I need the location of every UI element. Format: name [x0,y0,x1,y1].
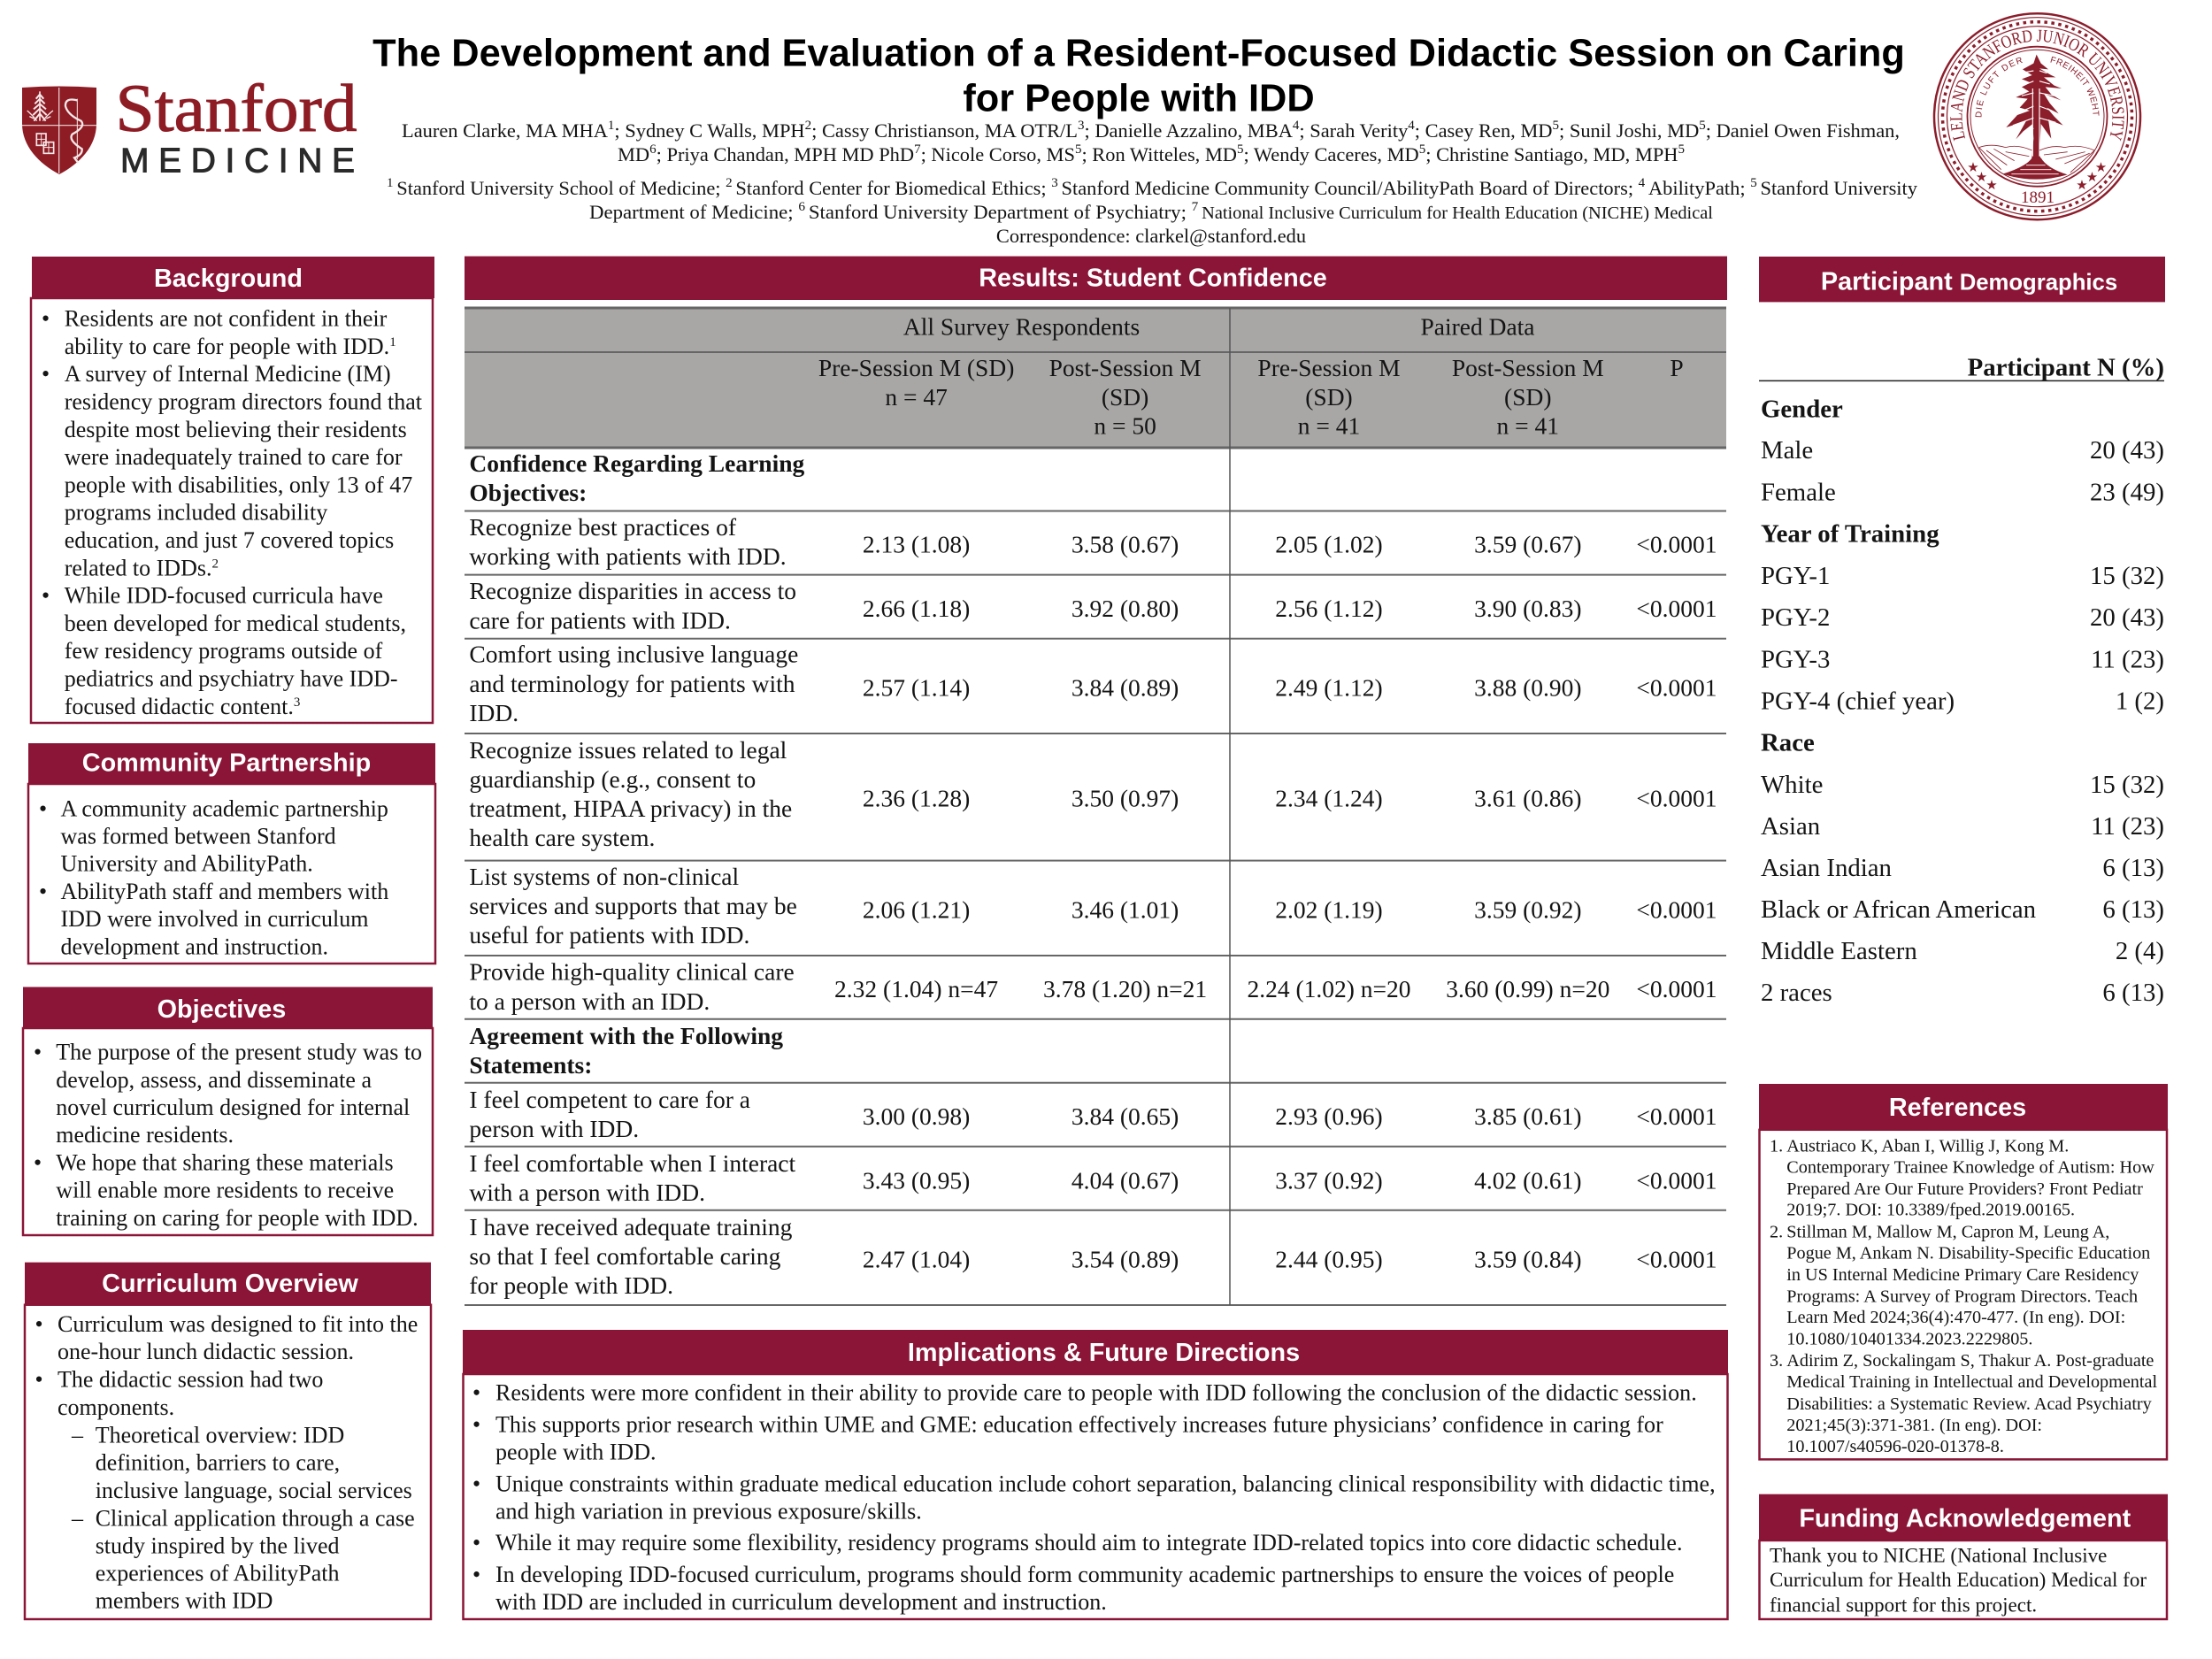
icon: Stanford University seal: LELAND STANFORD JUNIOR UNIVERSITY [1950,30,2124,142]
row: disparities: 3.90 (0.83) [1474,595,1582,622]
row: legal guardianship: <0.0001 [1636,784,1717,812]
heading: implications: Implications & Future Directions [908,1339,1300,1367]
table header: (SD) [1305,383,1353,411]
row: non-clinical services: services and supports that may be [469,892,797,919]
row: high-quality care: 3.78 (1.20) n=21 [1043,975,1207,1002]
row: disparities: 2.66 (1.18) [863,595,970,622]
table header: Pre-Session M [1257,354,1401,381]
table: demographics: 15 (32) [2090,771,2164,799]
icon: Stanford University seal [1932,12,2141,221]
icon: Stanford University seal: FREIHEIT WEHT [2050,57,2099,116]
row: legal guardianship: 2.34 (1.24) [1275,784,1383,812]
row: best practices: 3.59 (0.67) [1474,531,1582,558]
row: best practices [469,513,1717,570]
table header: n = 47 [885,383,948,411]
authors: MD6; Priya Chandan, MPH MD PhD7; Nicole Corso, MS5; Ron Witteles, MD5; Wendy Caceres, MD5; Christine Santiago, MD, MPH5 [618,142,1685,165]
icon: Stanford University seal: DIE LUFT DER [1975,57,2023,117]
text: references list: 1. [1770,1136,1783,1156]
text: references list: Disabilities: a Systematic Review. Acad Psychiatry [1786,1394,2153,1414]
section label: agreement: Agreement with the Following [469,1022,783,1049]
table: demographics: Asian [1761,812,1820,841]
row: legal guardianship: 2.36 (1.28) [863,784,970,812]
text: community partnership bullets: • [39,796,47,821]
table: demographics: Male [1761,436,1813,465]
text: funding acknowledgement [1759,1540,2167,1619]
row: adequate training: I have received adequate training [469,1213,793,1240]
table: demographics: Year of Training [1761,520,1939,549]
text: references list: 2019;7. DOI: 10.3389/fped.2019.00165. [1786,1201,2075,1220]
table: demographics: White [1761,771,1823,799]
text: implications bullets [464,1374,1727,1619]
icon: Stanford University seal: ★ [1967,159,1979,175]
text: objectives bullets [23,1028,433,1235]
text: background bullets: residency program directors found that [65,389,423,414]
row: competent: I feel competent to care for a [469,1086,750,1113]
text: background bullets: programs included disability [65,500,327,526]
row: adequate training: <0.0001 [1636,1246,1717,1273]
text: references list: Prepared Are Our Future Providers? Front Pediatr [1786,1179,2143,1199]
text: references list: Austriaco K, Aban I, Willig J, Kong M. [1786,1136,2069,1156]
row: adequate training [469,1213,1717,1299]
text: community partnership bullets: • [39,879,47,904]
table: demographics: 6 (13) [2102,979,2164,1007]
row: legal guardianship: 3.61 (0.86) [1474,784,1582,812]
text: curriculum overview bullets: Clinical application through a case [96,1506,415,1531]
text: curriculum overview bullets: Curriculum was designed to fit into the [58,1311,418,1337]
heading: community partnership [28,743,435,784]
heading: curriculum overview: Curriculum Overview [102,1270,358,1298]
table header: Pre-Session M (SD) [818,354,1014,381]
text: implications bullets: • [472,1471,480,1496]
text: objectives bullets: novel curriculum designed for internal [56,1094,410,1120]
logo: Stanford Medicine [22,72,357,180]
text: references list: Learn Med 2024;36(4):470-477. (In eng). DOI: [1786,1308,2125,1327]
text: references list: 2. [1770,1222,1783,1241]
row: best practices: 2.13 (1.08) [863,531,970,558]
row: high-quality care [469,957,1717,1015]
text: objectives bullets: • [34,1150,42,1175]
text: background bullets: few residency programs outside of [65,638,383,664]
logo: Stanford Medicine: MEDICINE [120,142,355,180]
table: demographics: 1 (2) [2116,687,2164,715]
table: student confidence [465,308,1726,1305]
text: implications bullets: with IDD are included in curriculum development and instruction. [495,1589,1107,1615]
row: competent: 2.93 (0.96) [1275,1102,1383,1130]
heading: community partnership: Community Partnership [82,749,371,777]
heading: background [32,257,434,298]
row: disparities: 2.56 (1.12) [1275,595,1383,622]
row: non-clinical services: 2.06 (1.21) [863,896,970,924]
text: references list: Pogue M, Ankam N. Disability-Specific Education [1786,1244,2150,1263]
heading: results: Results: Student Confidence [979,264,1327,292]
row: non-clinical services: <0.0001 [1636,896,1717,924]
icon: Stanford University seal: ★ [1985,177,1998,193]
authors [402,119,1900,165]
icon: Stanford University seal: ★ [2086,169,2098,185]
table: demographics: PGY-4 (chief year) [1761,687,1955,715]
affiliations and correspondence: Department of Medicine; 6 Stanford University Department of Psychiatry; 7 National Inclusive Curriculum for Health Education (NICHE) Medical [589,200,1713,223]
table: demographics: 20 (43) [2090,603,2164,632]
row: high-quality care: to a person with an IDD. [469,987,710,1015]
row: best practices: 2.05 (1.02) [1275,531,1383,558]
table: demographics: Race [1761,729,1815,757]
row: inclusive language [469,641,1717,726]
table header: Post-Session M [1452,354,1604,381]
text: background bullets: despite most believing their residents [65,417,407,442]
row: high-quality care: Provide high-quality clinical care [469,957,795,986]
section label: confidence [469,449,805,506]
panel: background [31,257,434,723]
text: curriculum overview bullets: study inspired by the lived [96,1532,340,1559]
table: demographics: 23 (49) [2090,478,2164,506]
affiliations and correspondence: Correspondence: clarkel@stanford.edu [996,225,1306,247]
table: demographics [1759,354,2164,1007]
table: demographics: 15 (32) [2090,562,2164,590]
text: background bullets: related to IDDs.2 [65,555,219,580]
row: competent: 3.85 (0.61) [1474,1102,1582,1130]
table: demographics: 6 (13) [2102,854,2164,882]
heading: objectives: Objectives [157,995,286,1024]
row: high-quality care: 2.24 (1.02) n=20 [1247,975,1411,1002]
text: background bullets: focused didactic content.3 [65,694,300,719]
heading: participant demographics [1759,257,2165,302]
icon: Stanford University seal: ★ [2076,177,2088,193]
heading: implications [463,1330,1728,1374]
row: non-clinical services: 2.02 (1.19) [1275,896,1383,924]
text: background bullets: were inadequately trained to care for [65,444,403,470]
text: implications bullets: • [472,1530,480,1555]
row: adequate training: 2.44 (0.95) [1275,1246,1383,1273]
text: curriculum overview bullets: – [71,1423,84,1448]
table header: All Survey Respondents [903,313,1140,340]
table header: Post-Session M [1049,354,1202,381]
row: legal guardianship: Recognize issues related to legal [469,736,787,764]
row: inclusive language: and terminology for patients with [469,670,795,697]
text: community partnership bullets: development and instruction. [60,934,328,959]
row: legal guardianship [469,736,1717,851]
section label: agreement: Statements: [469,1051,592,1079]
text: implications bullets: • [472,1562,480,1587]
text: implications bullets: In developing IDD-focused curriculum, programs should form community academic partnerships to ensure the voices of people [495,1562,1674,1587]
text: community partnership bullets: IDD were involved in curriculum [60,906,369,932]
heading: curriculum overview [25,1263,431,1305]
text: community partnership bullets [28,784,435,964]
row: competent: 3.84 (0.65) [1071,1102,1179,1130]
panel: objectives [23,987,433,1235]
table: demographics: 2 (4) [2116,937,2164,965]
heading: objectives [23,987,433,1028]
row: best practices: Recognize best practices of [469,513,737,541]
heading: references: References [1889,1094,2026,1122]
row: competent: <0.0001 [1636,1102,1717,1130]
icon: Stanford University seal: 1891 [2021,188,2055,207]
text: background bullets: ability to care for people with IDD.1 [65,334,396,359]
panel: participant demographics [1759,257,2165,1007]
row: high-quality care: <0.0001 [1636,975,1717,1002]
text: background bullets: A survey of Internal Medicine (IM) [65,361,391,387]
text: funding acknowledgement: Curriculum for Health Education) Medical for [1770,1569,2147,1591]
text: community partnership bullets: AbilityPath staff and members with [60,879,388,904]
row: inclusive language: 2.49 (1.12) [1275,673,1383,701]
text: background bullets: been developed for medical students, [65,611,406,636]
text: objectives bullets: The purpose of the present study was to [56,1039,422,1064]
text: references list: Medical Training in Intellectual and Developmental [1786,1372,2157,1392]
table header: Paired Data [1420,313,1535,340]
row: non-clinical services: List systems of non-clinical [469,863,740,890]
text: references list: in US Internal Medicine Primary Care Residency [1786,1265,2139,1285]
authors: Lauren Clarke, MA MHA1; Sydney C Walls, MPH2; Cassy Christianson, MA OTR/L3; Danielle Azzalino, MBA4; Sarah Verity4; Casey Ren, MD5; Sunil Joshi, MD5; Daniel Owen Fishman, [402,119,1900,142]
text: curriculum overview bullets: inclusive language, social services [96,1478,412,1503]
section label: confidence: Objectives: [469,479,587,506]
row: inclusive language: <0.0001 [1636,673,1717,701]
row: comfortable: <0.0001 [1636,1166,1717,1194]
table: demographics: Middle Eastern [1761,937,1917,965]
text: objectives bullets: develop, assess, and disseminate a [56,1067,372,1093]
table: demographics: 11 (23) [2091,812,2164,841]
row: comfortable [469,1149,1717,1206]
panel: community partnership [28,743,435,964]
row: non-clinical services: useful for patients with IDD. [469,921,749,949]
text: funding acknowledgement: Thank you to NICHE (National Inclusive [1770,1545,2107,1566]
panel: results student confidence [465,257,1727,1305]
row: legal guardianship: health care system. [469,824,655,851]
text: community partnership bullets: A community academic partnership [60,796,388,821]
text: background bullets: • [42,583,50,609]
row: disparities [469,577,1717,634]
row: legal guardianship: treatment, HIPAA privacy) in the [469,795,792,822]
row: competent: person with IDD. [469,1115,639,1142]
text: background bullets: education, and just 7 covered topics [65,527,394,553]
icon: Stanford University seal: ★ [2095,159,2107,175]
text: references list: 10.1080/10401334.2023.2229805. [1786,1329,2032,1348]
row: best practices: <0.0001 [1636,531,1717,558]
row: inclusive language: Comfort using inclusive language [469,641,798,668]
heading: background: Background [154,265,303,293]
text: curriculum overview bullets [25,1305,431,1619]
text: references list: Stillman M, Mallow M, Capron M, Leung A, [1786,1222,2109,1241]
text: objectives bullets: training on caring for people with IDD. [56,1205,419,1231]
text: references list: 2021;45(3):371-381. (In eng). DOI: [1786,1416,2042,1435]
text: implications bullets: • [472,1380,480,1406]
text: references list: Programs: A Survey of Program Directors. Teach [1786,1286,2138,1306]
table header: n = 50 [1094,412,1156,440]
text: curriculum overview bullets: – [71,1506,84,1531]
heading: participant demographics: Participant Demographics [1821,268,2117,296]
table header: (SD) [1102,383,1148,411]
row: comfortable: 3.37 (0.92) [1275,1166,1383,1194]
text: references list: 10.1007/s40596-020-01378-8. [1786,1437,2004,1456]
row: non-clinical services: 3.59 (0.92) [1474,896,1582,924]
text: objectives bullets: We hope that sharing these materials [56,1150,394,1175]
text: background bullets: • [42,306,50,332]
table header: n = 41 [1497,412,1559,440]
text: background bullets: people with disabilities, only 13 of 47 [65,472,412,497]
text: curriculum overview bullets: one-hour lunch didactic session. [58,1339,354,1364]
table: demographics: 20 (43) [2090,436,2164,465]
text: background bullets [31,298,433,723]
row: high-quality care: 2.32 (1.04) n=47 [834,975,998,1002]
panel: funding acknowledgement [1759,1494,2168,1619]
row: adequate training: 3.59 (0.84) [1474,1246,1582,1273]
text: funding acknowledgement: financial support for this project. [1770,1594,2037,1616]
text: curriculum overview bullets: The didactic session had two [58,1367,323,1393]
text: community partnership bullets: University and AbilityPath. [60,851,313,877]
text: implications bullets: Residents were more confident in their ability to provide care to people with IDD following the conclusion of the didactic session. [495,1380,1697,1406]
row: comfortable: I feel comfortable when I interact [469,1149,796,1177]
text: curriculum overview bullets: • [35,1367,43,1393]
row: adequate training: 3.54 (0.89) [1071,1246,1179,1273]
row: disparities: Recognize disparities in access to [469,577,796,604]
text: implications bullets: This supports prior research within UME and GME: education effectively increases future physicians’ confidence in caring for [495,1411,1663,1437]
text: curriculum overview bullets: definition, barriers to care, [96,1450,340,1476]
row: adequate training: 2.47 (1.04) [863,1246,970,1273]
title: The Development and Evaluation of a Resident-Focused Didactic Session on Caring [373,32,1905,74]
affiliations and correspondence: 1 Stanford University School of Medicine; 2 Stanford Center for Biomedical Ethics; 3 Stanford Medicine Community Council/AbilityPath Board of Directors; 4 AbilityPath; 5 Stanford University [387,176,1918,199]
text: implications bullets: While it may require some flexibility, residency programs should aim to integrate IDD-related topics into core didactic schedule. [495,1530,1682,1555]
table header [818,313,1684,440]
row: inclusive language: 2.57 (1.14) [863,673,970,701]
table: demographics: 11 (23) [2091,645,2164,673]
row: inclusive language: 3.88 (0.90) [1474,673,1582,701]
table: demographics: 2 races [1761,979,1832,1007]
row: inclusive language: 3.84 (0.89) [1071,673,1179,701]
table: demographics: Gender [1761,395,1843,423]
row: comfortable: 4.02 (0.61) [1474,1166,1582,1194]
row: best practices: working with patients with IDD. [469,542,787,570]
section label: agreement [469,1022,783,1079]
text: background bullets: While IDD-focused curricula have [65,583,383,609]
icon: Stanford Medicine shield [22,87,96,174]
text: background bullets: pediatrics and psychiatry have IDD- [65,665,398,692]
table header: n = 41 [1298,412,1360,440]
row: disparities: 3.92 (0.80) [1071,595,1179,622]
row: inclusive language: IDD. [469,699,518,726]
table: demographics: PGY-3 [1761,645,1830,673]
table: demographics: PGY-1 [1761,562,1830,590]
table: demographics: Female [1761,478,1836,506]
icon: Stanford University seal: ★ [1976,169,1987,185]
text: curriculum overview bullets: • [35,1311,43,1337]
text: objectives bullets: will enable more residents to receive [56,1177,394,1203]
row: adequate training: for people with IDD. [469,1271,673,1299]
row: non-clinical services: 3.46 (1.01) [1071,896,1179,924]
row: adequate training: so that I feel comfortable caring [469,1242,781,1270]
row: comfortable: with a person with IDD. [469,1179,705,1206]
table: demographics: PGY-2 [1761,603,1830,632]
row: disparities: care for patients with IDD. [469,606,731,634]
row: disparities: <0.0001 [1636,595,1717,622]
row: best practices: 3.58 (0.67) [1071,531,1179,558]
row: non-clinical services [469,863,1717,949]
title [373,32,1905,120]
panel: references [1759,1084,2168,1459]
table header: (SD) [1504,383,1552,411]
affiliations and correspondence [387,176,1918,247]
text: references list [1759,1130,2167,1459]
text: curriculum overview bullets: experiences of AbilityPath [96,1561,340,1586]
table: demographics: Black or African American [1761,895,2036,924]
row: legal guardianship: guardianship (e.g., consent to [469,765,756,793]
text: background bullets: Residents are not confident in their [65,306,388,332]
row: high-quality care: 3.60 (0.99) n=20 [1446,975,1609,1002]
table: demographics: Asian Indian [1761,854,1892,882]
section label: confidence: Confidence Regarding Learning [469,449,805,477]
row: comfortable: 3.43 (0.95) [863,1166,970,1194]
heading: references [1759,1084,2168,1130]
text: references list: 3. [1770,1351,1783,1371]
heading: funding acknowledgement [1759,1494,2168,1540]
table: demographics: Participant N (%) [1968,354,2164,382]
text: community partnership bullets: was formed between Stanford [60,823,336,849]
table header: P [1670,354,1684,381]
text: references list: Contemporary Trainee Knowledge of Autism: How [1786,1158,2154,1178]
text: implications bullets: people with IDD. [495,1440,657,1465]
table: demographics: 6 (13) [2102,895,2164,924]
text: implications bullets: • [472,1411,480,1437]
row: competent: 3.00 (0.98) [863,1102,970,1130]
row: legal guardianship: 3.50 (0.97) [1071,784,1179,812]
row: comfortable: 4.04 (0.67) [1071,1166,1179,1194]
text: curriculum overview bullets: components. [58,1394,174,1420]
title: for People with IDD [963,78,1315,120]
text: objectives bullets: • [34,1039,42,1064]
text: objectives bullets: medicine residents. [56,1122,234,1148]
text: curriculum overview bullets: Theoretical overview: IDD [96,1423,344,1448]
panel: curriculum overview [25,1263,431,1619]
text: implications bullets: and high variation in previous exposure/skills. [495,1499,922,1525]
text: references list: Adirim Z, Sockalingam S, Thakur A. Post-graduate [1786,1351,2154,1371]
logo: Stanford Medicine: Stanford [115,72,357,146]
text: background bullets: • [42,361,50,387]
heading: results [465,257,1727,300]
row: competent [469,1086,1717,1142]
heading: funding acknowledgement: Funding Acknowledgement [1799,1504,2131,1532]
text: curriculum overview bullets: members with IDD [96,1588,273,1614]
text: implications bullets: Unique constraints within graduate medical education include cohort separation, balancing clinical responsibility with didactic time, [495,1471,1716,1496]
panel: implications and future directions [463,1330,1728,1619]
